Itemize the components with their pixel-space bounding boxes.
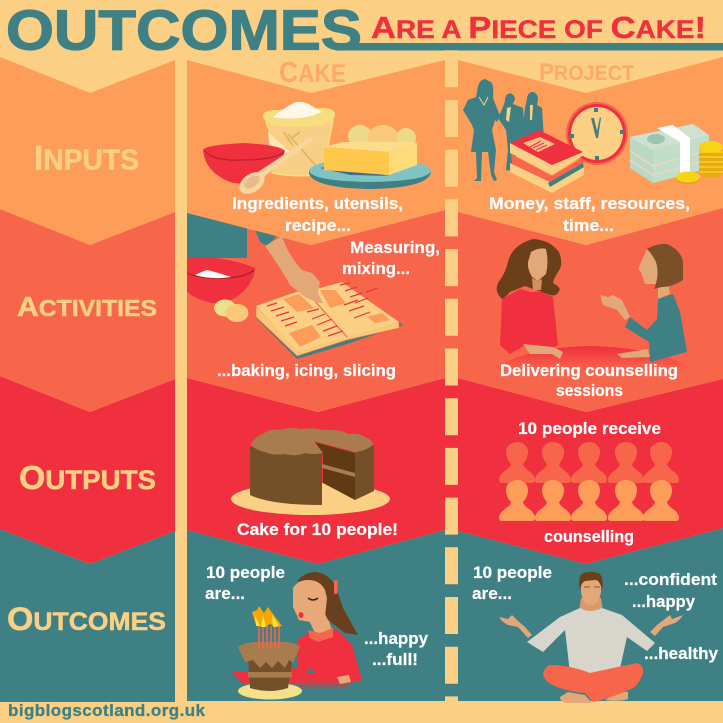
caption: counselling: counselling bbox=[544, 527, 634, 546]
caption: confident happy: ...confident bbox=[624, 570, 717, 589]
caption: 10 people are, cake: 10 people bbox=[206, 563, 285, 582]
caption: ingredients bbox=[232, 194, 403, 235]
icon: butter on plate bbox=[309, 125, 431, 189]
panel: left label column bbox=[0, 57, 175, 702]
caption: happy full: ...happy bbox=[364, 629, 429, 648]
caption: money: time... bbox=[563, 216, 614, 235]
label: activities: ACTIVITIES bbox=[17, 291, 157, 322]
column heading: cake: CAKE bbox=[279, 57, 346, 89]
icon: counselling table bbox=[495, 346, 692, 370]
caption: confident happy bbox=[624, 570, 717, 611]
panel: activities band bbox=[187, 208, 723, 412]
icon: birthday cake bbox=[238, 606, 302, 700]
caption: confident happy: ...happy bbox=[632, 592, 696, 611]
icon: mixing bowl bbox=[187, 257, 255, 303]
caption: money: Money, staff, resources, bbox=[489, 194, 690, 213]
caption: baking: ...baking, icing, slicing bbox=[217, 361, 396, 380]
icon: flour bag bbox=[263, 102, 335, 176]
label: inputs: INPUTS bbox=[34, 140, 139, 178]
caption: money bbox=[489, 194, 690, 235]
caption: 10 people are, cake: are... bbox=[205, 584, 245, 603]
caption: delivering bbox=[500, 361, 678, 400]
icon: open recipe book bbox=[256, 282, 403, 359]
icon: counsellor woman bbox=[497, 239, 563, 359]
icon: girl blowing candles bbox=[232, 572, 362, 690]
icon: client woman bbox=[600, 244, 687, 362]
column heading: project: PROJECT bbox=[539, 59, 634, 86]
label: outcomes: OUTCOMES bbox=[7, 601, 166, 637]
icon: staff silhouettes bbox=[463, 79, 544, 181]
icon: meditating man bbox=[499, 572, 683, 703]
icon: pawn people row, front bbox=[499, 480, 679, 521]
caption: 10 people are, project: are... bbox=[472, 584, 512, 603]
caption: measuring bbox=[342, 238, 440, 278]
caption: ingredients: recipe... bbox=[285, 216, 351, 235]
icon: red bowl bbox=[203, 143, 285, 184]
icon: money stack bbox=[630, 124, 709, 183]
icon: chocolate cake bbox=[231, 428, 390, 515]
icon: stack of books bbox=[510, 130, 584, 193]
label: outputs: OUTPUTS bbox=[19, 459, 156, 496]
caption: 10 people are, project: 10 people bbox=[473, 563, 552, 582]
title: outcomes bbox=[6, 0, 723, 62]
icon: clock bbox=[566, 102, 628, 165]
caption: delivering: Delivering counselling bbox=[500, 361, 678, 380]
icon: reaching hand bbox=[265, 236, 323, 303]
caption: measuring: Measuring, bbox=[350, 238, 440, 257]
icon: coins bbox=[676, 141, 723, 184]
panel: outcomes band bbox=[187, 528, 723, 701]
caption: happy full bbox=[364, 629, 429, 669]
caption: happy full: ...full! bbox=[372, 650, 418, 669]
dashed divider bbox=[445, 50, 458, 701]
title: outcomes: OUTCOMES bbox=[6, 0, 362, 62]
caption: delivering: sessions bbox=[556, 381, 623, 400]
caption: 10 people are, cake bbox=[205, 563, 285, 603]
panel: outputs band bbox=[187, 378, 723, 564]
icon: eggs bbox=[214, 300, 248, 322]
caption: 10 people are, project bbox=[472, 563, 552, 603]
caption: healthy: ...healthy bbox=[644, 644, 719, 663]
icon: pawn people row, back bbox=[499, 442, 679, 483]
icon: apron and sleeve bbox=[187, 205, 280, 258]
footer url: bigblogscotland.org.uk bbox=[8, 701, 206, 720]
caption: cake for 10: Cake for 10 people! bbox=[237, 520, 398, 539]
panel: inputs band bbox=[187, 57, 723, 245]
icon: wooden spoon bbox=[235, 137, 313, 198]
caption: measuring: mixing... bbox=[342, 259, 410, 278]
subtitle: ARE A PIECE OF CAKE! bbox=[371, 10, 706, 45]
caption: 10 people receive: 10 people receive bbox=[518, 419, 661, 438]
caption: ingredients: Ingredients, utensils, bbox=[232, 194, 403, 213]
